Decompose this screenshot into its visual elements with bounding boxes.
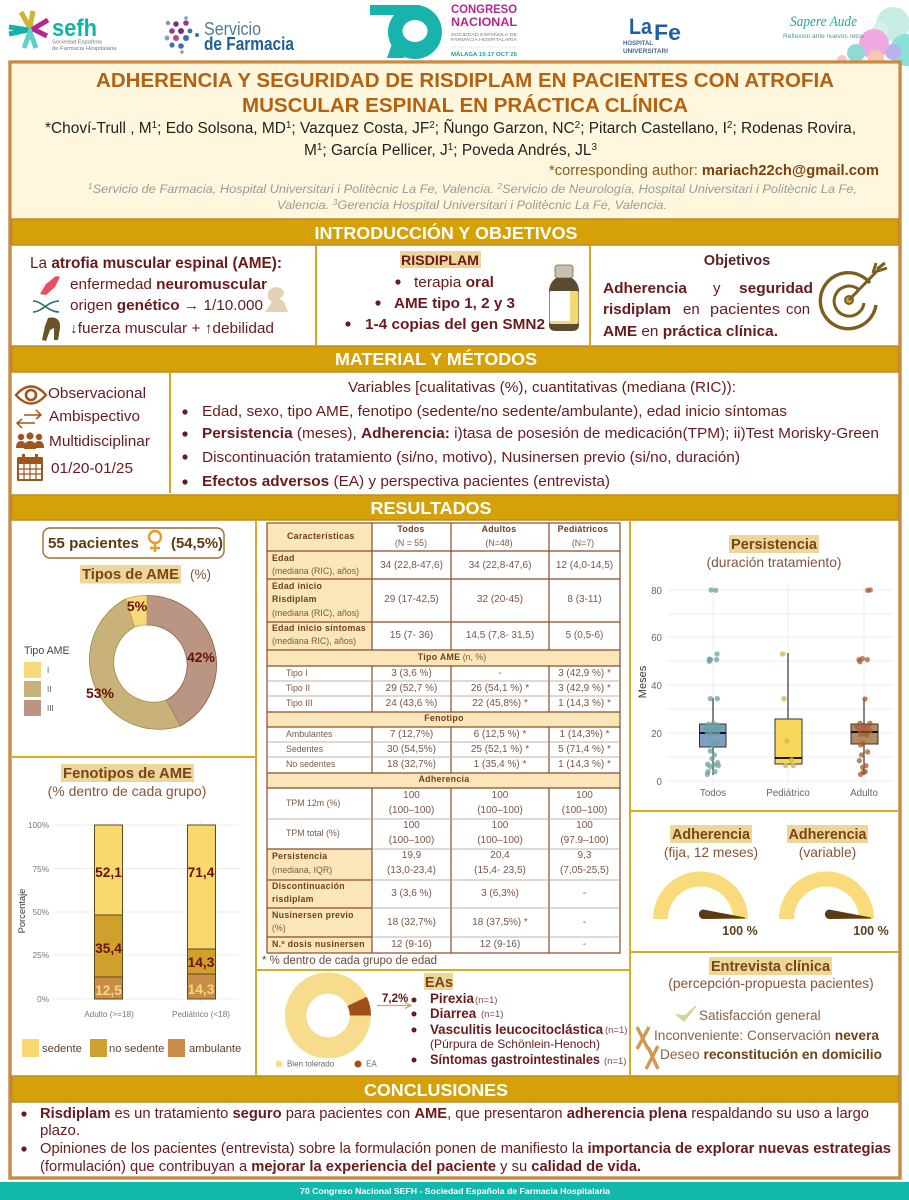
panel: study design: Multidisciplinar: [49, 433, 150, 450]
logo: sapere aude: [783, 7, 909, 66]
panel: ame definition: enfermedad neuromuscular: [70, 276, 267, 293]
authors: *Choví-Trull , M: [45, 120, 152, 137]
panel: variables: Edad, sexo, tipo AME, fenotipo (sedente/no sedente/ambulante), edad inicio síntomas: [202, 403, 787, 420]
heading: material y métodos: MATERIAL Y MÉTODOS: [335, 348, 537, 369]
table: características: 100: [403, 790, 420, 801]
table: características: 32 (20-45): [477, 594, 523, 605]
affiliations: Servicio de Neurología, Hospital Universitari i Politècnic La Fe,: [502, 182, 857, 196]
stacked bar chart: 50%: [33, 908, 49, 917]
table: características: 26 (54,1 %) *: [471, 683, 529, 694]
table: características: 1 (14,3 %) *: [558, 698, 611, 709]
panel: ame definition: La atrofia muscular espinal (AME):: [30, 255, 282, 272]
legend: tipo ame: [24, 645, 70, 716]
authors: 1: [286, 120, 292, 131]
table: características: 20,4: [490, 850, 510, 861]
logo: sefh: [9, 11, 117, 52]
gauge: fija: 100 %: [722, 924, 758, 938]
table: características: Persistencia: [272, 851, 327, 861]
table: características: (100–100): [389, 805, 434, 816]
logo: sapere aude: Sapere Aude: [790, 14, 857, 30]
logo: la fe: Fe: [654, 20, 681, 45]
patient count box: 55 pacientes: [48, 535, 139, 552]
panel: objetivos: seguridad: [739, 280, 813, 297]
panel: tipos de ame: Tipos de AME: [82, 567, 179, 583]
table: características: Características: [287, 531, 355, 541]
table: características: 30 (54,5%): [387, 744, 436, 755]
table: características: Adherencia: [419, 774, 469, 784]
panel: entrevista clínica: Entrevista clínica: [711, 959, 831, 975]
table: características: (100–100): [477, 805, 523, 816]
table: características: (mediana (RIC), años): [272, 566, 359, 576]
legend: tipo ame: II: [47, 685, 51, 694]
panel: conclusiones: plazo.: [40, 1122, 80, 1139]
dividers: [316, 245, 590, 345]
panel: efectos adversos: (n=1): [605, 1025, 627, 1036]
table: características: Tipo I: [286, 668, 308, 678]
panel: ame definition: [30, 255, 288, 341]
affiliations: Servicio de Farmacia, Hospital Universitari i Politècnic La Fe, Valencia.: [93, 182, 498, 196]
panel: conclusiones: (formulación) que contribuyan a mejorar la experiencia del paciente y su calidad de vida.: [40, 1158, 641, 1175]
box plot: Meses: [637, 665, 649, 698]
table: características: -: [583, 939, 586, 950]
table: características: Edad inicio: [272, 581, 323, 591]
panel: efectos adversos: (Púrpura de Schönlein-Henoch): [430, 1037, 600, 1051]
box plot: [637, 582, 893, 799]
legend: fenotipos: sedente: [42, 1043, 82, 1055]
table: características: 15 (7- 36): [390, 630, 433, 641]
panel: study design: 01/20-01/25: [51, 460, 133, 477]
panel: efectos adversos: EAs: [425, 975, 453, 991]
footer: 70 Congreso Nacional SEFH - Sociedad Española de Farmacia Hospitalaria: [300, 1186, 610, 1196]
table: características: (N=48): [485, 538, 513, 548]
box plot: 20: [651, 729, 663, 740]
panel: objetivos: AME en práctica clínica.: [603, 323, 778, 340]
title: [96, 69, 834, 117]
affiliations: Gerencia Hospital Universitari i Politècnic La Fe, Valencia.: [337, 198, 667, 212]
arrow: [377, 1002, 411, 1008]
panel: persistencia: (duración tratamiento): [707, 555, 841, 570]
table: características: 100: [576, 790, 593, 801]
table footnote: * % dentro de cada grupo de edad: [262, 955, 437, 967]
table: características: 5 (71,4 %) *: [558, 744, 611, 755]
logo: la fe: [623, 14, 681, 55]
panel: adherencia: (fija, 12 meses): [664, 845, 758, 860]
authors: 2: [429, 120, 435, 131]
icon: cross: [646, 1046, 658, 1069]
stacked bar chart: 14,3: [188, 982, 215, 997]
table: características: 8 (3-11): [567, 594, 602, 605]
stacked bar chart: 35,4: [95, 941, 122, 956]
panel: ame definition: origen genético → 1/10.000: [70, 297, 263, 314]
panel: tipos de ame: (%): [190, 567, 211, 582]
table: características: 3 (42,9 %) *: [558, 668, 611, 679]
logo: servicio de farmacia: de Farmacia: [204, 34, 295, 54]
panel: objetivos: Adherencia: [603, 280, 688, 297]
authors: ; Pitarch Castellano, I: [580, 120, 727, 137]
panel: efectos adversos: Pirexia: [430, 991, 474, 1006]
table: características: 9,3: [578, 850, 592, 861]
donut chart: eas: Bien tolerado: [287, 1060, 335, 1068]
table: características: TPM total (%): [286, 828, 340, 838]
title: ADHERENCIA Y SEGURIDAD DE RISDIPLAM EN PACIENTES CON ATROFIA: [96, 69, 834, 92]
table: características: 100: [403, 820, 420, 831]
table: características: Fenotipo: [424, 713, 464, 723]
table: características: 18 (37,5%) *: [472, 917, 528, 928]
donut chart: tipos: 5%: [127, 598, 148, 614]
icon: muscle: [40, 276, 60, 295]
logo: 70 congreso nacional: FARMACIA HOSPITALARIA: [451, 37, 518, 43]
logo: la fe: UNIVERSITARI: [623, 48, 668, 55]
panel: efectos adversos: (n=1): [604, 1056, 626, 1067]
authors: ; Vazquez Costa, JF: [291, 120, 429, 137]
stacked bar chart: Porcentaje: [16, 889, 27, 933]
logo: la fe: HOSPITAL: [623, 40, 653, 47]
stacked bar chart: 52,1: [95, 865, 122, 880]
table: características: (mediana, IQR): [272, 865, 332, 875]
table: características: 14,5 (7,8- 31,5): [466, 630, 534, 641]
panel: variables: Persistencia (meses), Adherencia: i)tasa de posesión de medicación(TPM); ii)Test Morisky-Green: [202, 425, 879, 442]
panel: entrevista clínica: Satisfacción general: [699, 1008, 821, 1023]
table: características: 29 (17-42,5): [384, 594, 439, 605]
table: características: -: [583, 888, 586, 899]
table: características: 3 (3,6 %): [391, 668, 432, 679]
stacked bar chart: 71,4: [188, 865, 215, 880]
footer: [0, 1182, 909, 1200]
panel: entrevista clínica: (percepción-propuesta pacientes): [668, 976, 874, 991]
logo: la fe: La: [629, 14, 653, 39]
table: características: (15,4- 23,5): [474, 865, 526, 876]
heading: material y métodos: [12, 346, 898, 372]
authors: 1: [317, 142, 323, 153]
authors: ; Poveda Andrés, JL: [453, 142, 592, 159]
table: características: (N=7): [572, 538, 594, 548]
table: características: 3 (6,3%): [481, 888, 519, 899]
panel: objetivos: con: [786, 301, 810, 318]
stacked bar chart: 12,5: [95, 983, 122, 998]
panel: persistencia: Persistencia: [731, 537, 818, 553]
legend: tipo ame: I: [47, 666, 49, 675]
panel: objetivos: Objetivos: [704, 253, 770, 269]
logo: 70 congreso nacional: NACIONAL: [451, 17, 517, 29]
table: características: 18 (32,7%): [387, 759, 436, 770]
table: características: (100–100): [389, 835, 434, 846]
table: características: Risdiplam: [272, 594, 317, 604]
table: características: No sedentes: [286, 759, 336, 769]
stacked bar chart: [16, 820, 239, 1019]
table: características: Todos: [397, 524, 425, 534]
table: características: 1 (14,3%) *: [559, 729, 610, 740]
table: características: [267, 523, 620, 953]
table: características: 25 (52,1 %) *: [471, 744, 529, 755]
panel: efectos adversos: 7,2%: [382, 993, 408, 1005]
panel dividers: [12, 520, 898, 1075]
panel: adherencia: (variable): [799, 845, 856, 860]
table: características: 3 (3,6 %): [391, 888, 432, 899]
table: características: (%): [272, 923, 286, 933]
panel: ame definition: ↓fuerza muscular + ↑debilidad: [70, 320, 274, 337]
stacked bar chart: 14,3: [188, 955, 215, 970]
table: características: Pediátricos: [558, 524, 608, 534]
authors: 1: [152, 120, 158, 131]
table: características: Adultos: [482, 524, 516, 534]
icon: target: [820, 263, 887, 329]
icon: check: [677, 1006, 696, 1021]
icon: calendar: [17, 454, 43, 481]
panel: variables: Discontinuación tratamiento (si/no, motivo), Nusinersen previo (si/no, duración): [202, 449, 740, 466]
legend: tipo ame: III: [47, 704, 54, 713]
panel: study design: Ambispectivo: [49, 408, 140, 425]
patient count box: [43, 528, 224, 558]
table: características: TPM 12m (%): [286, 798, 340, 808]
table: características: (100–100): [562, 805, 607, 816]
panel: objetivos: risdiplam: [603, 301, 671, 318]
points: adulto: [854, 587, 873, 777]
title: MUSCULAR ESPINAL EN PRÁCTICA CLÍNICA: [242, 94, 688, 117]
table: características: 18 (32,7%): [387, 917, 436, 928]
affiliations: Valencia.: [277, 198, 327, 212]
panel: adherencia: Adherencia: [672, 827, 751, 843]
table: características: (7,05-25,5): [560, 865, 609, 876]
panel: efectos adversos: Vasculitis leucocitoclástica: [430, 1022, 604, 1037]
table: características: 12 (9-16): [391, 939, 432, 950]
donut chart: eas: [276, 972, 377, 1068]
panel: efectos adversos: Síntomas gastrointestinales: [430, 1052, 600, 1067]
heading: introducción y objetivos: [12, 219, 898, 245]
points: todos: [703, 587, 723, 777]
icon: arrows: [17, 410, 41, 428]
table: características: Sedentes: [286, 744, 324, 754]
table: características: risdiplam: [272, 894, 314, 904]
donut chart: tipos: 53%: [86, 685, 115, 701]
stacked bar chart: 100%: [28, 821, 49, 830]
box plot: Pediátrico: [766, 788, 810, 799]
table: características: 1 (35,4 %) *: [474, 759, 527, 770]
panel: entrevista clínica: [637, 957, 882, 1069]
panel: study design: Observacional: [48, 385, 146, 402]
points: pediátrico: [780, 651, 796, 768]
heading: conclusiones: CONCLUSIONES: [364, 1080, 508, 1100]
icon: weak figure: [42, 317, 60, 341]
gauge: fija: [653, 872, 758, 938]
panel: entrevista clínica: Deseo reconstitución en domicilio: [660, 1047, 882, 1062]
table: características: 5 (0,5-6): [566, 630, 603, 641]
table: características: (N = 55): [395, 538, 427, 548]
table: características: 100: [492, 790, 509, 801]
table: características: (13,0-23,4): [387, 865, 436, 876]
table: características: Ambulantes: [286, 729, 333, 739]
authors: ; Rodenas Rovira,: [732, 120, 856, 137]
icon: cross: [637, 1027, 649, 1049]
donut chart: tipos: [86, 596, 217, 729]
logo: 70 congreso nacional: [370, 4, 518, 59]
authors: ; Edo Solsona, MD: [157, 120, 286, 137]
table: características: 3 (42,9 %) *: [558, 683, 611, 694]
heading: introducción y objetivos: INTRODUCCIÓN Y OBJETIVOS: [314, 222, 578, 243]
authors: ; García Pellicer, J: [322, 142, 448, 159]
box plot: 80: [651, 586, 663, 597]
panel: efectos adversos: (n=1): [481, 1009, 503, 1020]
legend: fenotipos: ambulante: [189, 1043, 241, 1055]
table: características: 19,9: [402, 850, 422, 861]
table: características: 12 (9-16): [480, 939, 520, 950]
panel: conclusiones: [21, 1105, 891, 1175]
logo: servicio de farmacia: [165, 16, 295, 54]
panel: objetivos: y: [713, 280, 721, 297]
panel: title block: [12, 64, 898, 218]
table: características: 24 (43,6 %): [386, 698, 437, 709]
panel: entrevista clínica: Inconveniente: Conservación nevera: [654, 1028, 879, 1043]
authors: M: [304, 142, 317, 159]
table: características: 1 (14,3 %) *: [558, 759, 611, 770]
table: características: -: [583, 917, 586, 928]
table: características: Nusinersen previo: [272, 910, 354, 920]
panel: risdiplam: RISDIPLAM: [401, 253, 479, 269]
panel: adherencia: Adherencia: [788, 827, 867, 843]
table: características: 6 (12,5 %) *: [474, 729, 527, 740]
panel: variables: Efectos adversos (EA) y perspectiva pacientes (entrevista): [202, 473, 610, 490]
icon: eye: [16, 386, 46, 404]
panel: persistencia: [637, 535, 893, 799]
legend: fenotipos: [22, 1039, 241, 1057]
stacked bar chart: 75%: [33, 865, 49, 874]
gauge: variable: [779, 872, 889, 938]
panel: study design: [16, 385, 150, 481]
panel: objetivos: [603, 253, 887, 340]
heading: conclusiones: [12, 1076, 898, 1102]
logo: 70 congreso nacional: CONGRESO: [451, 4, 517, 16]
icon: bottle: [549, 265, 579, 331]
table: características: 34 (22,8-47,6): [469, 560, 531, 571]
panel: risdiplam: AME tipo 1, 2 y 3: [394, 295, 515, 312]
panel: efectos adversos: (n=1): [475, 995, 497, 1006]
logo: 70 congreso nacional: SOCIEDAD ESPAÑOLA DE: [451, 31, 517, 38]
box plot: 40: [651, 681, 663, 692]
panel: objetivos: en: [683, 301, 700, 318]
table: características: 12 (4,0-14,5): [556, 560, 613, 571]
corresponding author: *corresponding author: mariach22ch@gmail.com: [549, 163, 879, 179]
logo: sapere aude: Reflexión ante nuevos retos: [783, 33, 865, 40]
table: características: Edad: [272, 553, 295, 563]
table: características: (mediana (RIC), años): [272, 608, 359, 618]
authors: 2: [575, 120, 581, 131]
box plot: Adulto: [850, 788, 878, 799]
panel: risdiplam: terapia oral: [414, 274, 494, 291]
icon: female: [149, 531, 161, 552]
heading: resultados: [12, 495, 898, 520]
donut chart: tipos: 42%: [187, 649, 216, 665]
table: características: 22 (45,8%) *: [472, 698, 528, 709]
affiliations: 3: [333, 198, 338, 207]
authors: ; Ñungo Garzon, NC: [435, 120, 575, 137]
authors: 3: [591, 142, 597, 153]
panel: efectos adversos: Diarrea: [430, 1006, 477, 1021]
logo: sefh: sefh: [52, 15, 97, 42]
panel: risdiplam: 1-4 copias del gen SMN2: [365, 316, 545, 333]
table: características: (mediana RIC), años): [272, 636, 356, 646]
panel: fenotipos de ame: [16, 764, 241, 1057]
table: características: 29 (52,7 %): [386, 683, 437, 694]
authors: 1: [448, 142, 454, 153]
table: características: (97.9–100): [560, 835, 609, 846]
table: características: 100: [492, 820, 509, 831]
table: características: 100: [576, 820, 593, 831]
table: características: Edad inicio síntomas: [272, 623, 366, 633]
legend: tipo ame: Tipo AME: [24, 645, 70, 657]
stacked bar chart: Pediátrico (<18): [172, 1010, 230, 1019]
logo: 70 congreso nacional: MÁLAGA 15-17 OCT 25: [451, 51, 517, 58]
affiliations: 1: [88, 182, 93, 191]
panel: adherencia: [653, 825, 889, 938]
box plot: 60: [651, 633, 663, 644]
panel: fenotipos de ame: Fenotipos de AME: [63, 766, 192, 782]
stacked bar chart: Adulto (>=18): [84, 1010, 134, 1019]
panel: objetivos: pacientes: [710, 301, 780, 318]
table: características: N.º dosis nusinersen: [272, 939, 365, 949]
table: características: (100–100): [477, 835, 523, 846]
box plot: Todos: [700, 788, 726, 799]
panel: tipos de ame: [24, 528, 224, 729]
legend: fenotipos: no sedente: [109, 1043, 164, 1055]
table: características: -: [498, 668, 502, 679]
panel: risdiplam: [345, 251, 579, 333]
table: características: Tipo II: [286, 683, 310, 693]
icon: baby: [265, 287, 288, 312]
gauge: variable: 100 %: [853, 924, 889, 938]
icon: dna: [33, 301, 59, 312]
authors: 2: [727, 120, 733, 131]
box plot: 0: [657, 777, 663, 788]
panel: conclusiones: Opiniones de los pacientes (entrevista) sobre la formulación ponen de manifiesto la importancia de explorar nuevas estrategias: [40, 1140, 891, 1157]
panel: variables: [182, 379, 879, 490]
panel: conclusiones: Risdiplam es un tratamiento seguro para pacientes con AME, que presentaron adherencia plena respaldando su uso a largo: [40, 1105, 869, 1122]
table: características: Tipo AME (n, %): [418, 652, 486, 662]
table: características: Tipo III: [286, 698, 313, 708]
stacked bar chart: 0%: [37, 995, 49, 1004]
panel: fenotipos de ame: (% dentro de cada grupo): [48, 783, 206, 799]
stacked bar chart: 25%: [33, 951, 49, 960]
authors: [45, 120, 856, 159]
table: características: Discontinuación: [272, 881, 345, 891]
table: características: 7 (12,7%): [390, 729, 433, 740]
heading: resultados: RESULTADOS: [370, 498, 492, 518]
patient count box: (54,5%): [171, 535, 223, 552]
logo: sefh: de Farmacia Hospitalaria: [52, 46, 117, 52]
donut chart: eas: EA: [366, 1060, 377, 1068]
panel: efectos adversos: [276, 972, 627, 1068]
affiliations: 2: [496, 182, 503, 191]
icon: team: [16, 432, 44, 449]
table: características: 34 (22,8-47,6): [380, 560, 443, 571]
logo: sefh: Sociedad Española: [52, 40, 103, 46]
logo: servicio de farmacia: Servicio: [204, 19, 261, 39]
affiliations: [88, 182, 857, 212]
panel: variables: Variables [cualitativas (%), cuantitativas (mediana (RIC)):: [348, 379, 736, 396]
